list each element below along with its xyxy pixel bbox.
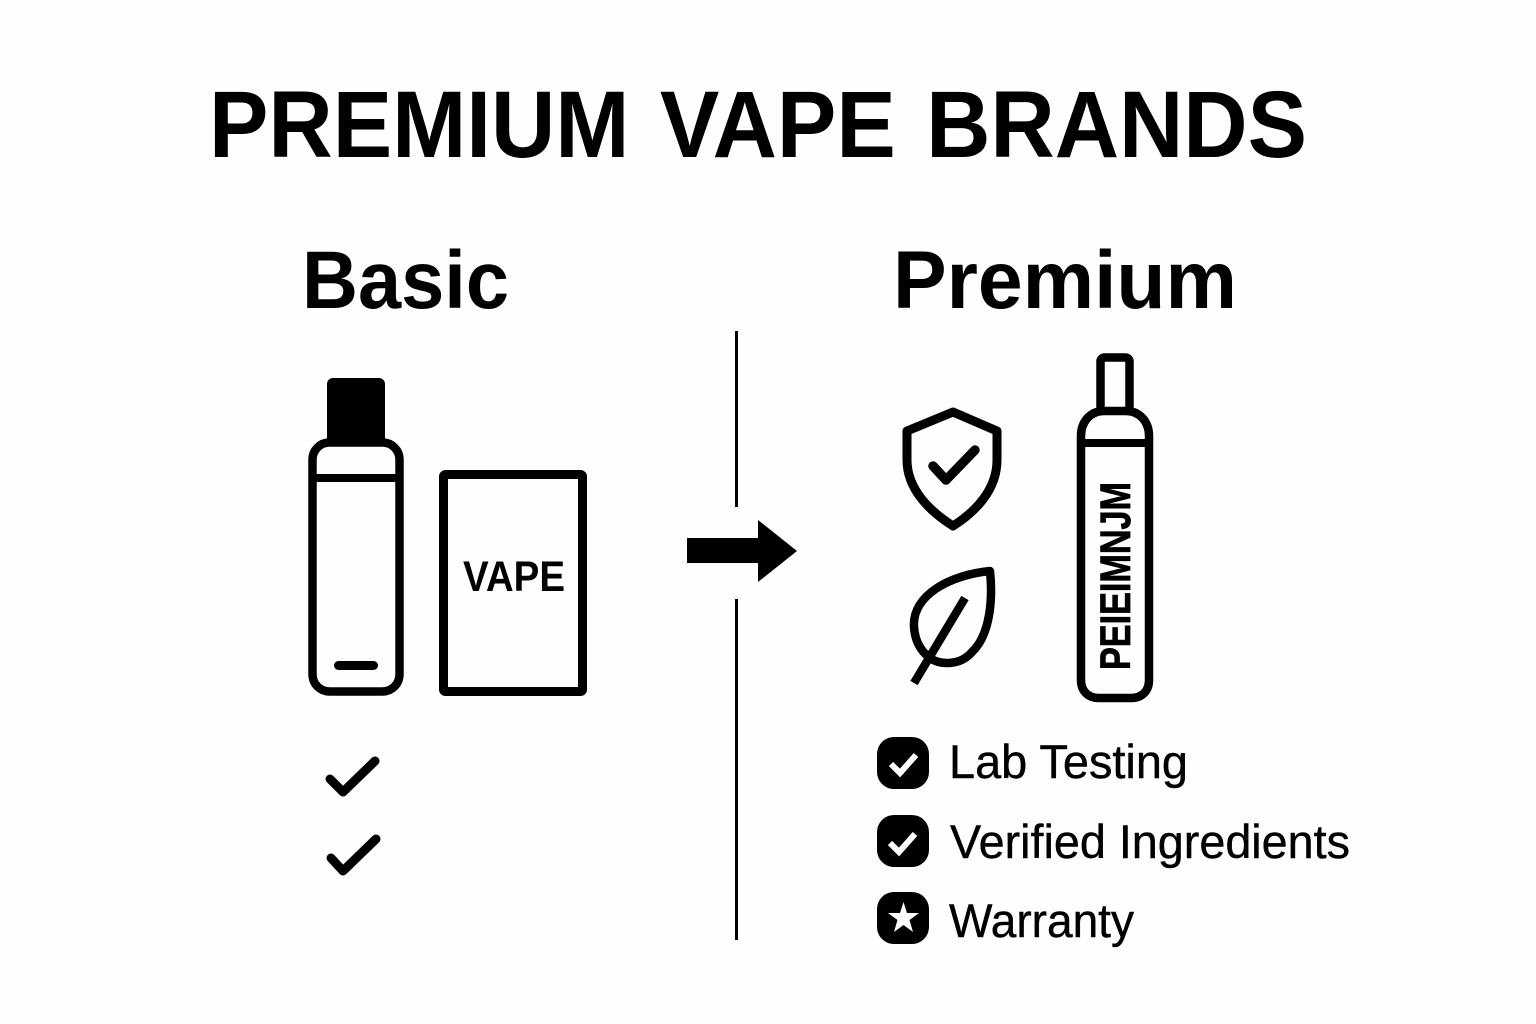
arrow (687, 520, 797, 582)
icon: premium vape pen (1081, 358, 1149, 698)
heading: Premium: Premium (893, 235, 1237, 326)
heading: Basic: Basic (302, 235, 509, 326)
label: Verified Ingredients (950, 815, 1350, 868)
icon: leaf (914, 571, 991, 683)
feature: Warranty (877, 892, 1134, 947)
icon: basic package box (444, 474, 582, 692)
icon: shield with check (907, 412, 997, 526)
label: Lab Testing (949, 735, 1188, 788)
package label: VAPE (463, 553, 565, 601)
icon: basic vape bottle (312, 378, 400, 692)
pen label: PEIEIMNJM (1092, 482, 1140, 670)
title: PREMIUM VAPE BRANDS (209, 72, 1307, 178)
divider (735, 331, 738, 940)
icon: star badge (877, 892, 929, 944)
feature: Verified Ingredients (877, 815, 1350, 868)
label: Warranty (949, 894, 1134, 947)
icon: check badge (877, 737, 929, 789)
icon: check badge (877, 815, 929, 867)
feature: Lab Testing (877, 735, 1188, 789)
basic checkmarks (330, 761, 376, 871)
